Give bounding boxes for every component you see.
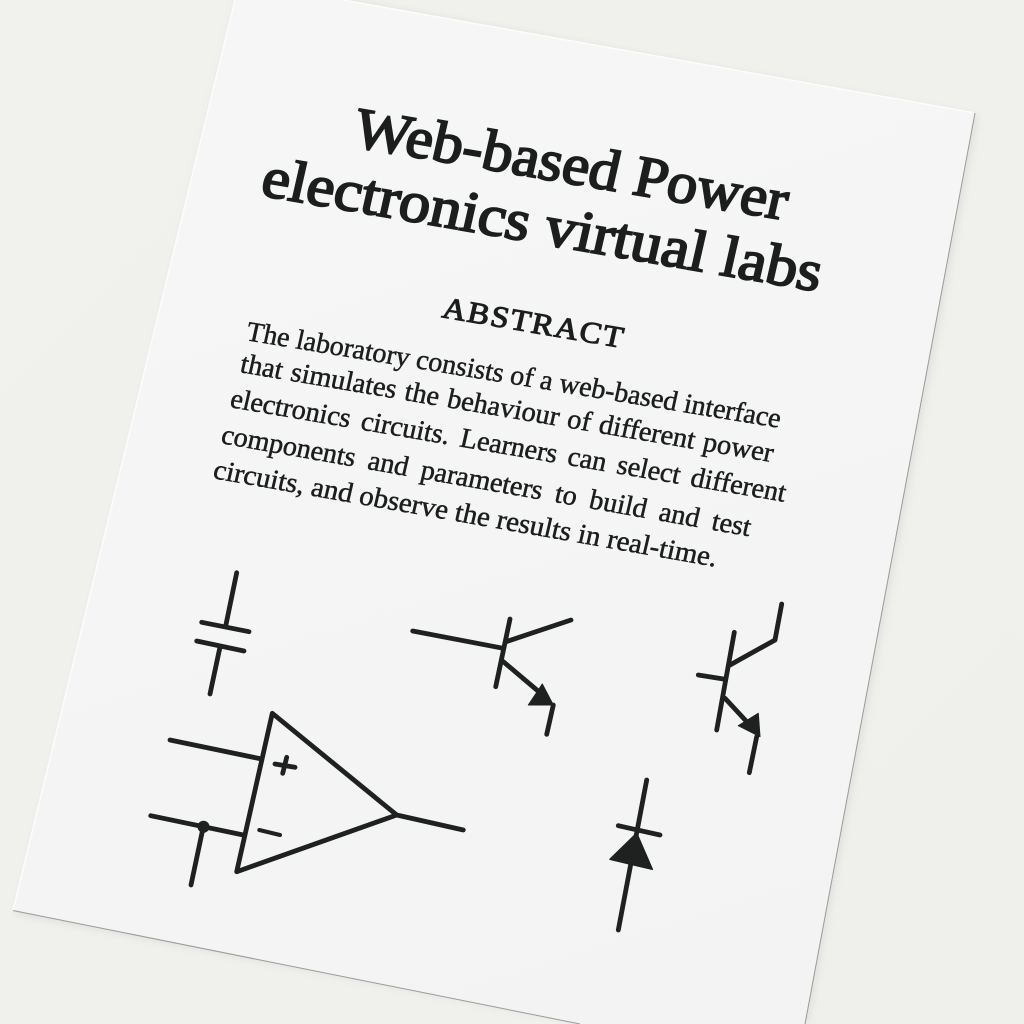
abstract body text: components and parameters to build and test [218, 420, 754, 543]
abstract body text: The laboratory consists of a web-based interface [244, 317, 784, 435]
abstract body text: that simulates the behaviour of different power [237, 349, 777, 469]
icon: operational amplifier symbol [151, 713, 463, 885]
abstract body text: circuits, and observe the results in real-time. [210, 455, 721, 574]
abstract body text [210, 317, 789, 574]
icon: PNP transistor symbol [698, 604, 782, 773]
abstract heading: ABSTRACT [439, 292, 628, 355]
abstract body text: electronics circuits. Learners can select different [227, 384, 789, 509]
title: electronics virtual labs [256, 144, 829, 304]
icon: NPN transistor symbol [413, 619, 571, 734]
icon: capacitor symbol [197, 573, 249, 694]
title [256, 95, 829, 304]
icon: diode symbol [610, 780, 660, 930]
title: Web-based Power [348, 95, 795, 233]
